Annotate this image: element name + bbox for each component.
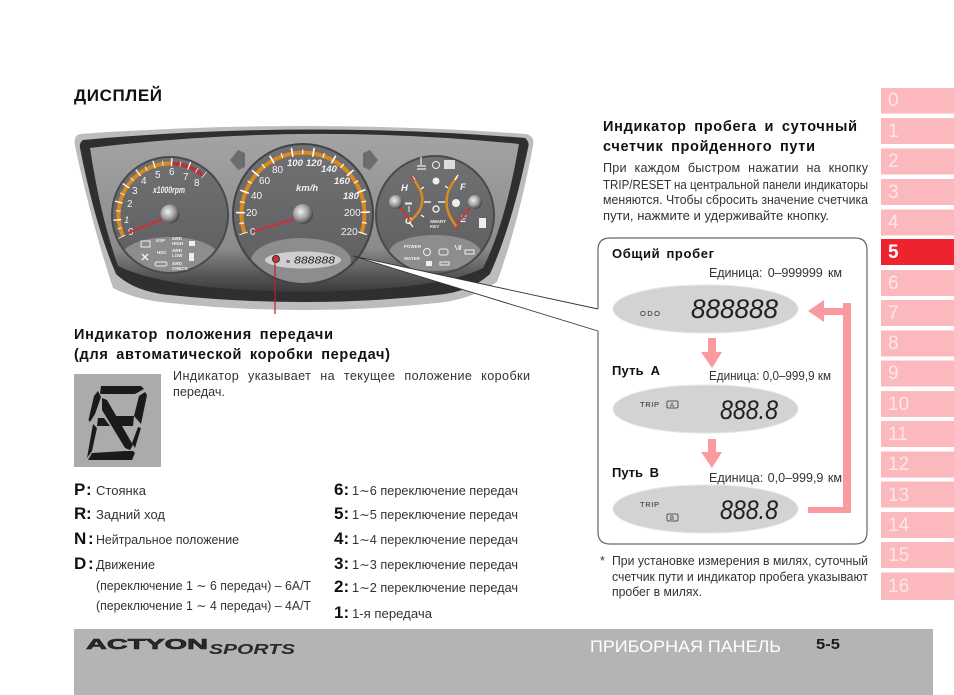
trip B display: TRIP: [640, 500, 659, 509]
heading: gear position: (для автоматической коробки передач): [74, 347, 390, 363]
list: automatic positions: :: [86, 504, 92, 523]
text: odometer description: пути, нажмите и удерживайте кнопку.: [603, 209, 829, 223]
speedometer: 80: [272, 165, 284, 176]
sidebar: chapter tabs: 1: [888, 121, 899, 142]
label: trip B: Единица: 0,0–999,9 км: [709, 471, 842, 485]
tachometer: 0: [128, 227, 134, 238]
list: manual gear ranges: [334, 480, 518, 622]
speedometer: 200: [344, 208, 361, 219]
sidebar: chapter tabs: 10: [888, 394, 909, 415]
panel: display modes: [598, 238, 867, 544]
gear and odometer window: [265, 252, 341, 268]
tachometer: 4WD: [172, 261, 183, 266]
tachometer: 7: [183, 172, 189, 183]
sidebar: chapter tabs: 11: [888, 424, 908, 445]
label: total mileage: [612, 246, 842, 280]
fuel and temperature gauge: SMART: [430, 219, 446, 224]
gear indicator leader line: [274, 262, 276, 314]
label: trip B: [612, 465, 842, 485]
list: manual gear ranges: 1∼3 переключение передач: [352, 558, 518, 572]
page number: 5-5: [816, 636, 840, 653]
text: gear indicator description: Индикатор указывает на текущее положение коробки: [173, 369, 530, 383]
fuel and temperature gauge: [375, 155, 495, 275]
heading: odometer and trip meter: Индикатор пробега и суточный: [603, 119, 857, 135]
sidebar: chapter tabs: 2: [888, 151, 899, 172]
trip B display: B: [670, 516, 674, 522]
sidebar: chapter tabs: 7: [888, 303, 899, 324]
instrument cluster: [75, 126, 533, 310]
label: total mileage: Единица: 0–999999 км: [709, 266, 842, 280]
heading: odometer and trip meter: [603, 119, 857, 155]
speedometer: 40: [251, 191, 263, 202]
callout wedge to odometer: [353, 256, 598, 331]
sidebar: chapter tabs: 4: [888, 212, 899, 233]
tachometer: 2: [127, 199, 133, 210]
tachometer: 4WD: [172, 236, 183, 241]
tachometer: 3: [132, 186, 138, 197]
tachometer: 4: [141, 176, 147, 187]
footnote: *: [600, 554, 605, 568]
odometer display: 888888: [691, 294, 778, 324]
footnote: При установке измерения в милях, суточный: [612, 554, 868, 568]
speedometer: km/h: [296, 183, 318, 194]
list: manual gear ranges: 2:: [334, 577, 349, 596]
speedometer: 140: [321, 164, 338, 175]
footer bar: [74, 629, 933, 695]
list: automatic positions: Движение: [96, 558, 155, 572]
label: trip A: Единица: 0,0–999,9 км: [709, 369, 831, 383]
footnote: пробег в милях.: [612, 585, 702, 599]
speedometer: 220: [341, 227, 358, 238]
list: automatic positions: N: [74, 529, 86, 548]
trip B display: [613, 485, 798, 533]
sidebar: chapter tabs: 9: [888, 363, 899, 384]
tachometer: 1: [124, 215, 129, 226]
list: automatic positions: :: [88, 554, 94, 573]
tachometer: 4WD: [172, 248, 183, 253]
fuel and temperature gauge: E: [460, 214, 467, 225]
footnote: счетчик пути и индикатор пробега указывают: [612, 570, 868, 584]
label: trip B: Путь B: [612, 465, 659, 480]
icon: gear position segment display: [74, 374, 161, 467]
speedometer: 0: [250, 227, 256, 238]
heading: gear position: Индикатор положения передачи: [74, 327, 333, 343]
list: automatic positions: D: [74, 554, 86, 573]
trip B display: 888.8: [720, 495, 778, 525]
label: trip A: [612, 363, 831, 383]
speedometer: 180: [343, 191, 360, 202]
speedometer: 120: [306, 158, 323, 169]
list: automatic positions: :: [86, 480, 92, 499]
logo: ACTYON: [86, 636, 208, 653]
sidebar: chapter tabs: 5: [888, 242, 899, 263]
logo: [86, 636, 295, 658]
sidebar: chapter tabs: [881, 88, 954, 600]
tachometer: HDC: [157, 250, 167, 255]
tachometer: 8: [194, 178, 200, 189]
list: manual gear ranges: 1∼5 переключение передач: [352, 508, 518, 522]
list: automatic positions: Стоянка: [96, 484, 146, 498]
speedometer: 20: [246, 208, 258, 219]
gear and odometer window: ≋: [286, 259, 290, 265]
text: gear indicator description: передач.: [173, 385, 225, 399]
sidebar: chapter tabs: 14: [888, 515, 910, 536]
fuel and temperature gauge: KEY: [430, 224, 439, 229]
list: automatic positions: Нейтральное положение: [96, 533, 239, 547]
odometer display: ODO: [640, 309, 660, 318]
gear and odometer window: 888888: [294, 256, 336, 266]
speedometer: 60: [259, 176, 271, 187]
text: odometer description: [603, 161, 869, 223]
list: automatic positions: R: [74, 504, 86, 523]
sidebar: chapter tabs: 6: [888, 273, 899, 294]
arrow: trip A to trip B: [701, 439, 722, 468]
arrow: return to odometer: [808, 300, 851, 513]
sidebar: chapter tabs: 16: [888, 576, 909, 597]
fuel and temperature gauge: POWER: [404, 244, 422, 249]
list: automatic positions: P: [74, 480, 85, 499]
list: automatic positions: Задний ход: [96, 508, 166, 522]
tachometer: [111, 156, 229, 275]
title: ДИСПЛЕЙ: [74, 86, 162, 105]
label: trip A: Путь А: [612, 363, 661, 378]
icon: right turn signal: [363, 150, 378, 170]
sidebar: chapter tabs: 3: [888, 182, 899, 203]
tachometer: HIGH: [172, 241, 183, 246]
list: manual gear ranges: 4:: [334, 529, 349, 548]
trip A display: [613, 385, 798, 433]
sidebar: chapter tabs: 0: [888, 90, 899, 111]
text: odometer description: меняются. Чтобы сбросить значение счетчика: [603, 193, 868, 207]
list: manual gear ranges: 1∼6 переключение передач: [352, 484, 518, 498]
speedometer: 100: [287, 158, 304, 169]
heading: gear position: [74, 327, 390, 363]
fuel and temperature gauge: C: [405, 216, 412, 227]
sidebar: chapter tabs: 12: [888, 454, 909, 475]
sidebar: chapter tabs: 13: [888, 485, 909, 506]
sidebar: chapter tabs: 8: [888, 333, 899, 354]
tachometer: LOW: [172, 253, 183, 258]
list: automatic positions: (переключение 1 ∼ 6 передач) – 6A/T: [96, 579, 311, 593]
odometer display: [613, 285, 798, 333]
sidebar: chapter tabs: 15: [888, 545, 909, 566]
list: manual gear ranges: 1-я передача: [352, 607, 432, 621]
trip A display: TRIP: [640, 400, 659, 409]
fuel and temperature gauge: F: [460, 182, 466, 193]
trip A display: A: [670, 403, 674, 409]
fuel and temperature gauge: H: [401, 183, 409, 194]
list: manual gear ranges: 5:: [334, 504, 349, 523]
label: total mileage: Общий пробег: [612, 246, 715, 261]
list: automatic positions: :: [88, 529, 94, 548]
section title: ПРИБОРНАЯ ПАНЕЛЬ: [590, 637, 781, 656]
tachometer: 5: [155, 170, 161, 181]
icon: left turn signal: [230, 150, 245, 170]
list: manual gear ranges: 6:: [334, 480, 349, 499]
list: manual gear ranges: 1∼4 переключение передач: [352, 533, 518, 547]
fuel and temperature gauge: WATER: [404, 256, 421, 261]
list: automatic positions: (переключение 1 ∼ 4 передач) – 4A/T: [96, 599, 311, 613]
tachometer: 6: [169, 167, 175, 178]
speedometer: [232, 143, 374, 285]
heading: odometer and trip meter: счетчик пройденного пути: [603, 139, 815, 155]
text: odometer description: При каждом быстром нажатии на кнопку: [603, 161, 869, 175]
tachometer: x1000rpm: [152, 185, 185, 196]
text: gear indicator description: [173, 369, 530, 399]
text: odometer description: TRIP/RESET на центральной панели индикаторы: [603, 178, 868, 192]
list: manual gear ranges: 3:: [334, 554, 349, 573]
trip A display: 888.8: [720, 395, 778, 425]
list: manual gear ranges: 1∼2 переключение передач: [352, 581, 518, 595]
speedometer: 160: [334, 176, 351, 187]
arrow: odometer to trip A: [701, 338, 722, 368]
list: automatic positions: [74, 480, 311, 613]
footnote: [600, 554, 868, 599]
logo: SPORTS: [209, 641, 295, 658]
tachometer: ESP: [156, 238, 165, 243]
list: manual gear ranges: 1:: [334, 603, 349, 622]
tachometer: CHECK: [172, 266, 189, 271]
